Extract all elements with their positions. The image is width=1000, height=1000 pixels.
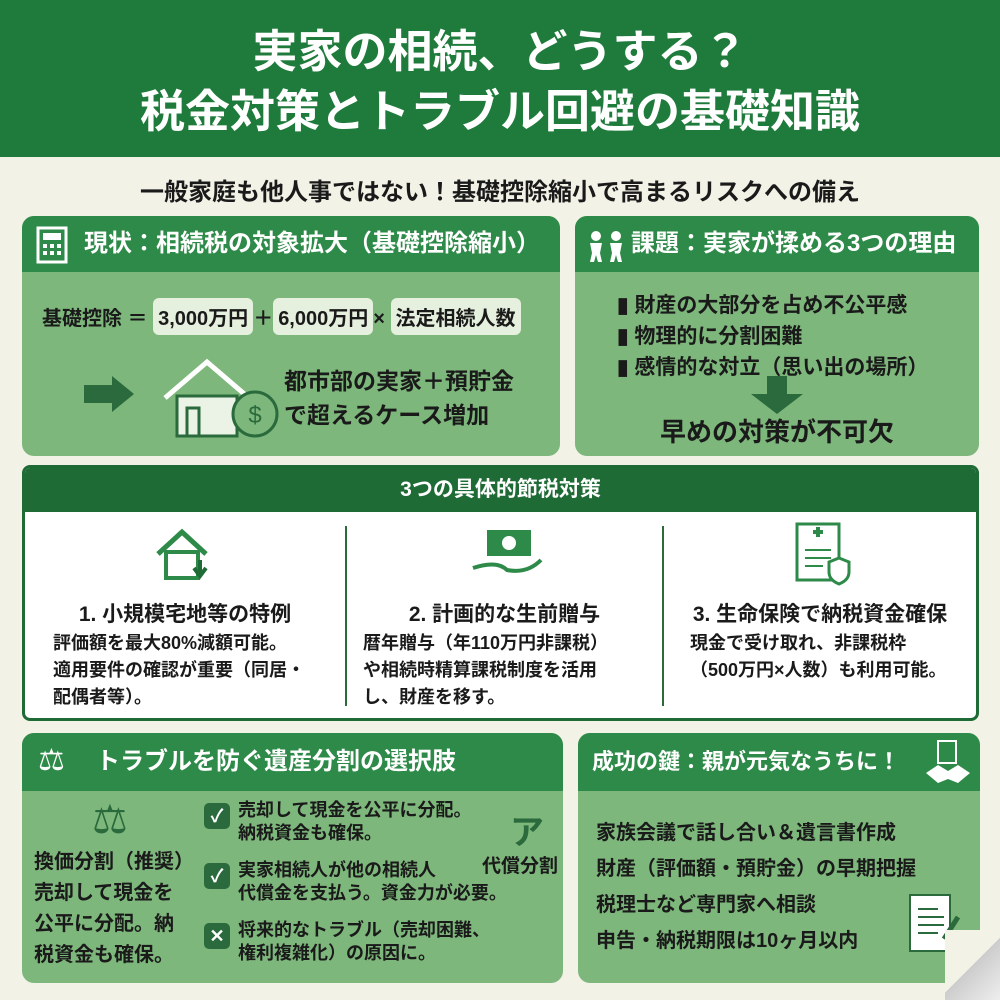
option list: 権利複雑化）の原因に。 (238, 943, 436, 963)
measure 3 (690, 522, 947, 680)
checklist: 家族会議で話し合い＆遺言書作成 (596, 822, 896, 844)
icon: house (156, 528, 208, 580)
icon: house and money bag: $ (248, 402, 262, 429)
page curl (945, 930, 1000, 1000)
formula: 6,000万円 (278, 308, 368, 330)
icon: scales small: ⚖ (92, 798, 128, 842)
heading (25, 468, 976, 512)
formula: 3,000万円 (158, 308, 248, 330)
icon: calculator (36, 226, 68, 264)
arrow (84, 376, 134, 412)
arrow down (751, 376, 803, 414)
option list: 代償金を支払う。資金力が必要。 (238, 883, 507, 903)
list of reasons (617, 294, 928, 379)
option list: ✓ (210, 806, 224, 826)
formula (42, 298, 521, 335)
heading: 現状：相続税の対象拡大（基礎控除縮小） (84, 230, 540, 257)
measure 2: や相続時精算課税制度を活用 (363, 660, 597, 680)
list of reasons: ▮ 物理的に分割困難 (617, 325, 802, 348)
measure 1: 1. 小規模宅地等の特例 (79, 603, 291, 626)
measure 3: （500万円×人数）も利用可能。 (690, 660, 947, 680)
icon: people (590, 231, 622, 262)
icon: document (909, 894, 960, 952)
panel: three tax measures (22, 465, 979, 721)
measure 2: 2. 計画的な生前贈与 (409, 603, 600, 626)
heading: トラブルを防ぐ遺産分割の選択肢 (96, 748, 456, 775)
measure 2: し、財産を移す。 (363, 687, 505, 707)
icon: scales: ⚖ (38, 744, 65, 777)
conclusion: 早めの対策が不可欠 (660, 417, 894, 447)
formula: 基礎控除 ＝ ＋ × (42, 308, 385, 330)
text: urban case: 都市部の実家＋預貯金 (284, 368, 514, 394)
formula: 法定相続人数 (396, 308, 516, 330)
heading (22, 216, 560, 272)
icon: insurance document (796, 522, 850, 586)
text: urban case (284, 368, 514, 428)
option list: ✕ (209, 926, 225, 946)
option list: 将来的なトラブル（売却困難、 (238, 920, 490, 940)
heading (578, 733, 980, 791)
checklist: 申告・納税期限は10ヶ月以内 (596, 930, 858, 952)
option list: 実家相続人が他の相続人 (238, 860, 436, 880)
text: 換価分割: 税資金も確保。 (34, 944, 174, 966)
icon: hand with money (472, 530, 542, 573)
option list: 納税資金も確保。 (238, 823, 382, 843)
heading: 課題：実家が揉める3つの理由 (631, 230, 956, 257)
panel: keys to success (578, 733, 980, 983)
text: 換価分割: 換価分割（推奨） (34, 851, 194, 873)
option list: ✓ (210, 866, 224, 886)
heading: 成功の鍵：親が元気なうちに！ (592, 749, 900, 774)
checklist (596, 822, 916, 952)
option list: 売却して現金を公平に分配。 (238, 800, 471, 820)
panel: issues (575, 216, 979, 456)
measure 1 (53, 528, 305, 707)
heading (22, 733, 563, 791)
checklist: 税理士など専門家へ相談 (596, 894, 816, 916)
list of reasons: ▮ 感情的な対立（思い出の場所） (617, 356, 928, 379)
text: 換価分割: 売却して現金を (34, 882, 173, 904)
measure 1: 配偶者等）。 (53, 687, 152, 707)
heading (575, 216, 979, 272)
title banner: 税金対策とトラブル回避の基礎知識 (140, 86, 860, 137)
panel: current status (22, 216, 560, 456)
title banner: 実家の相続、どうする？ (252, 26, 748, 77)
measure 2: 暦年贈与（年110万円非課税） (363, 633, 608, 653)
option list (204, 800, 507, 963)
title banner (0, 0, 1000, 157)
panel: division options (22, 733, 563, 983)
text: 換価分割: 公平に分配。納 (34, 913, 174, 935)
measure 2 (363, 530, 608, 707)
heading: 3つの具体的節税対策 (400, 478, 601, 501)
icon: house and money bag (164, 358, 278, 438)
checklist: 財産（評価額・預貯金）の早期把握 (596, 858, 916, 880)
icon: hammer: ア (510, 814, 544, 852)
subtitle: 一般家庭も他人事ではない！基礎控除縮小で高まるリスクへの備え (140, 179, 860, 206)
text: urban case: で超えるケース増加 (284, 402, 489, 428)
icon: handshake (926, 740, 970, 783)
text: 換価分割 (34, 850, 194, 966)
measure 3: 現金で受け取れ、非課税枠 (690, 633, 906, 653)
label: 代償分割: 代償分割 (482, 856, 558, 877)
measure 1: 評価額を最大80%減額可能。 (53, 633, 287, 653)
list of reasons: ▮ 財産の大部分を占め不公平感 (617, 294, 907, 317)
measure 3: 3. 生命保険で納税資金確保 (693, 603, 947, 626)
measure 1: 適用要件の確認が重要（同居・ (53, 660, 305, 680)
